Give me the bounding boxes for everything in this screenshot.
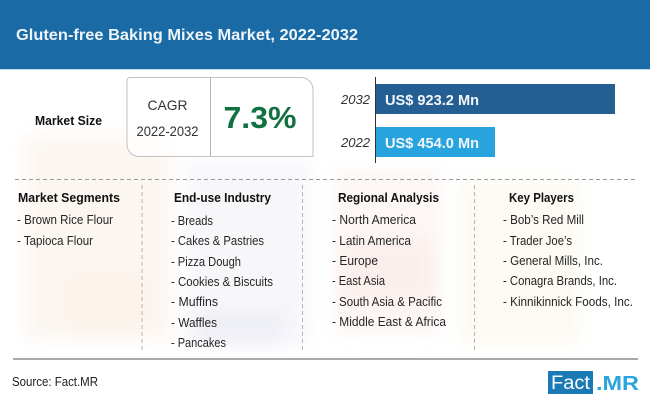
- panel: end-use industry: - Breads: [171, 214, 213, 228]
- panel: key players: - Kinnikinnick Foods, Inc.: [503, 295, 633, 309]
- bar 2032: US$ 923.2 Mn: [385, 93, 479, 109]
- panel: key players: [503, 190, 633, 309]
- panel: end-use industry: - Muffins: [171, 295, 218, 309]
- CAGR label: CAGR: [148, 97, 188, 113]
- panel: regional analysis: - East Asia: [332, 274, 385, 288]
- panel: end-use industry: - Cakes & Pastries: [171, 234, 264, 248]
- source note: Source: Fact.MR: [12, 374, 98, 389]
- bar 2022: US$ 454.0 Mn: [385, 136, 479, 152]
- panel: regional analysis: - Latin America: [332, 234, 411, 248]
- heading: end-use industry: End-use Industry: [174, 190, 272, 205]
- logo: Fact.MR: Fact: [551, 373, 591, 394]
- panel: end-use industry: - Waffles: [171, 316, 217, 330]
- logo: Fact.MR: .MR: [596, 373, 640, 395]
- panel: regional analysis: - South Asia & Pacific: [332, 295, 442, 309]
- bar 2022: 2022: [340, 135, 371, 150]
- panel: regional analysis: - Middle East & Africa: [332, 315, 446, 329]
- CAGR period: 2022-2032: [136, 124, 198, 139]
- title banner: [0, 0, 650, 70]
- logo: Fact.MR: [548, 371, 640, 395]
- panel: end-use industry: - Pancakes: [171, 336, 226, 350]
- panel: key players: - Bob’s Red Mill: [503, 213, 584, 227]
- bar 2032: 2032: [340, 92, 371, 107]
- bar 2032: [340, 84, 615, 114]
- CAGR value: 7.3%: [224, 100, 296, 135]
- panel: key players: - Conagra Brands, Inc.: [503, 274, 617, 288]
- panel: market segments: - Tapioca Flour: [17, 234, 93, 248]
- CAGR box: [127, 78, 313, 156]
- panel: market segments: [17, 190, 120, 248]
- heading: key players: Key Players: [509, 190, 574, 205]
- bar 2022: [340, 127, 495, 157]
- panel: market segments: - Brown Rice Flour: [17, 213, 113, 227]
- faded background product photo: [25, 135, 580, 345]
- panel: end-use industry: - Pizza Dough: [171, 255, 241, 269]
- panel: regional analysis: - Europe: [332, 254, 378, 268]
- panel: regional analysis: [332, 190, 446, 329]
- market size label: Market Size: [35, 113, 102, 128]
- heading: market segments: Market Segments: [18, 190, 120, 205]
- heading: regional analysis: Regional Analysis: [338, 190, 439, 205]
- bar chart: [340, 77, 615, 163]
- panel: regional analysis: - North America: [332, 213, 416, 227]
- panel: end-use industry: [171, 190, 273, 350]
- panel: end-use industry: - Cookies & Biscuits: [171, 275, 273, 289]
- panel: key players: - General Mills, Inc.: [503, 254, 603, 268]
- panel: key players: - Trader Joe’s: [503, 234, 572, 248]
- title: Gluten-free Baking Mixes Market, 2022-2032: [16, 27, 358, 44]
